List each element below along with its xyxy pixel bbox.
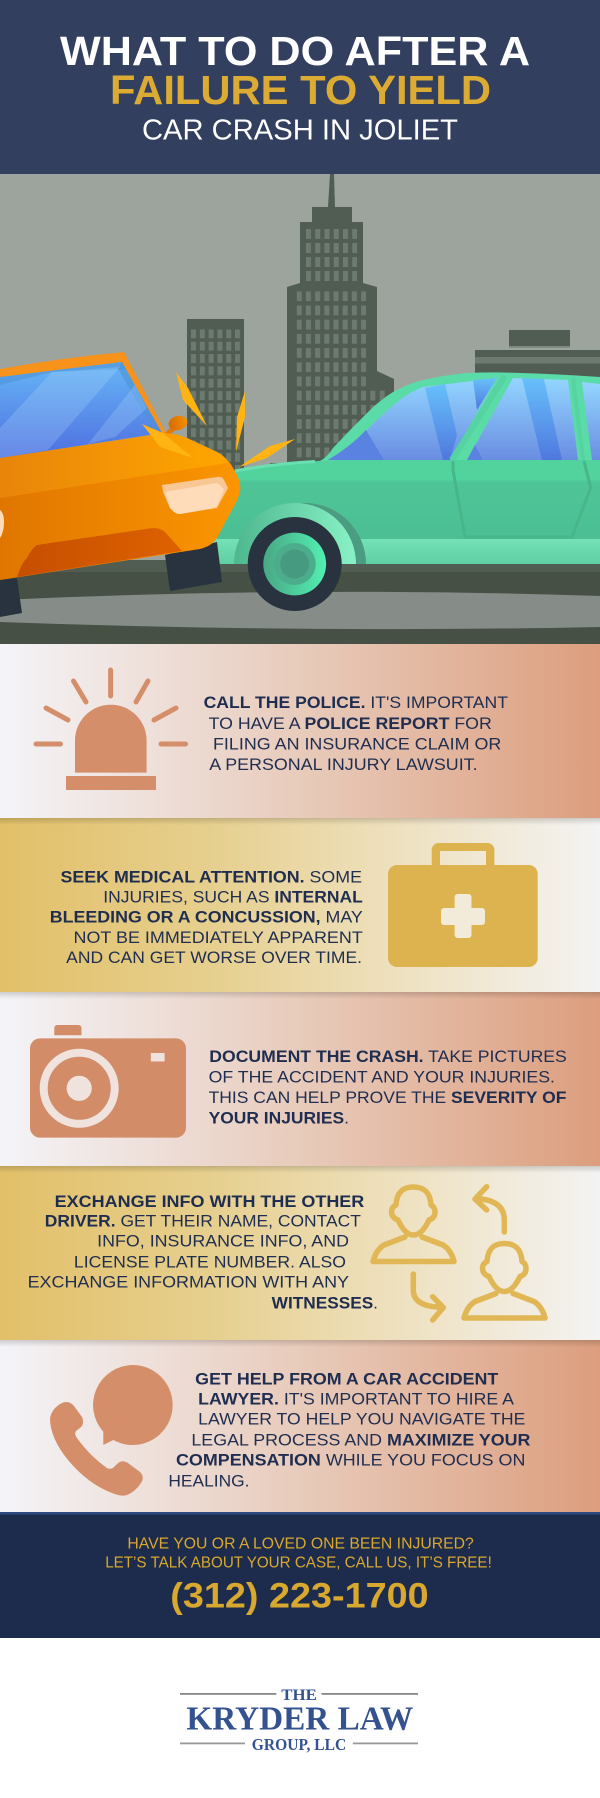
text: call the police: TO HAVE A POLICE REPORT FOR <box>209 714 492 733</box>
call to action panel <box>0 1512 600 1638</box>
logo: the kryder law group: KRYDER LAW <box>186 1701 413 1738</box>
text: call the police <box>204 693 508 774</box>
text: exchange info <box>28 1192 378 1312</box>
text: exchange info: INFO, INSURANCE INFO, AND <box>97 1232 349 1251</box>
icon: phone and speech bubble <box>50 1365 173 1496</box>
impact sparks <box>142 372 295 467</box>
text: get help from a lawyer: LAWYER TO HELP YOU NAVIGATE THE <box>198 1409 525 1428</box>
body <box>0 433 240 580</box>
panel: seek medical attention <box>0 818 600 992</box>
text: document the crash: OF THE ACCIDENT AND YOUR INJURIES. <box>209 1068 555 1086</box>
text: document the crash: YOUR INJURIES. <box>209 1108 349 1128</box>
logo: the kryder law group: THE <box>281 1687 317 1704</box>
panel: document the crash <box>0 992 600 1166</box>
text: get help from a lawyer: LEGAL PROCESS AND MAXIMIZE YOUR <box>191 1431 530 1450</box>
car windows <box>328 378 600 460</box>
text: exchange info: WITNESSES. <box>272 1294 378 1312</box>
windshield <box>0 352 167 435</box>
text: seek medical attention: INJURIES, SUCH AS INTERNAL <box>103 887 363 906</box>
icon: first aid kit <box>388 843 538 967</box>
call to action text: HAVE YOU OR A LOVED ONE BEEN INJURED? <box>127 1536 474 1552</box>
title line 2: FAILURE TO YIELD <box>110 67 491 113</box>
panel: get help from a lawyer <box>0 1340 600 1512</box>
text: get help from a lawyer: HEALING. <box>168 1471 250 1490</box>
skyline buildings <box>187 174 600 471</box>
icon: camera <box>30 1025 186 1138</box>
text: exchange info: EXCHANGE INFO WITH THE OTHER <box>55 1192 364 1211</box>
headlight <box>0 477 228 538</box>
text: call the police: CALL THE POLICE. IT'S IMPORTANT <box>204 693 508 712</box>
skirt <box>17 528 182 577</box>
text: seek medical attention: NOT BE IMMEDIATELY APPARENT <box>74 928 363 947</box>
text: seek medical attention: SEEK MEDICAL ATTENTION. SOME <box>60 867 362 886</box>
text: seek medical attention: AND CAN GET WORSE OVER TIME. <box>66 948 362 967</box>
panel: call the police <box>0 644 600 818</box>
car sill <box>205 539 600 564</box>
text: call the police: A PERSONAL INJURY LAWSUIT. <box>209 755 478 774</box>
call to action text line 2: LET’S TALK ABOUT YOUR CASE, CALL US, IT’S FREE! <box>105 1555 492 1572</box>
icon: people exchanging info <box>373 1187 545 1320</box>
phone number: (312) 223-1700 <box>170 1576 429 1616</box>
text: seek medical attention: BLEEDING OR A CONCUSSION, MAY <box>50 907 363 926</box>
green car <box>205 372 600 611</box>
text: seek medical attention <box>50 867 363 967</box>
title line 1: WHAT TO DO AFTER A <box>60 28 530 74</box>
text: get help from a lawyer: GET HELP FROM A CAR ACCIDENT <box>195 1370 499 1389</box>
mirror <box>165 416 188 434</box>
panel: exchange info <box>0 1166 600 1340</box>
front wheel <box>234 503 366 611</box>
text: get help from a lawyer: COMPENSATION WHILE YOU FOCUS ON <box>176 1450 525 1470</box>
header panel <box>0 0 600 174</box>
text: get help from a lawyer: LAWYER. IT'S IMPORTANT TO HIRE A <box>198 1390 515 1408</box>
title line 3: CAR CRASH IN JOLIET <box>142 114 458 146</box>
logo: the kryder law group: GROUP, LLC <box>252 1735 346 1754</box>
orange car <box>0 352 240 617</box>
car door outline <box>453 461 591 537</box>
icon: siren <box>36 670 186 790</box>
text: exchange info: DRIVER. GET THEIR NAME, CONTACT <box>45 1212 361 1231</box>
text: get help from a lawyer <box>168 1370 530 1490</box>
car body <box>205 460 600 545</box>
text: exchange info: EXCHANGE INFORMATION WITH ANY <box>28 1273 349 1292</box>
tires <box>165 542 222 591</box>
text: document the crash <box>209 1047 567 1128</box>
car roof <box>320 372 600 461</box>
text: call the police: FILING AN INSURANCE CLAIM OR <box>213 734 501 754</box>
text: document the crash: THIS CAN HELP PROVE THE SEVERITY OF <box>209 1088 566 1107</box>
hero illustration: car crash <box>0 174 600 644</box>
text: exchange info: LICENSE PLATE NUMBER. ALSO <box>74 1252 346 1271</box>
logo: the kryder law group <box>0 1638 600 1798</box>
road <box>0 560 600 644</box>
text: document the crash: DOCUMENT THE CRASH. TAKE PICTURES <box>209 1047 567 1066</box>
